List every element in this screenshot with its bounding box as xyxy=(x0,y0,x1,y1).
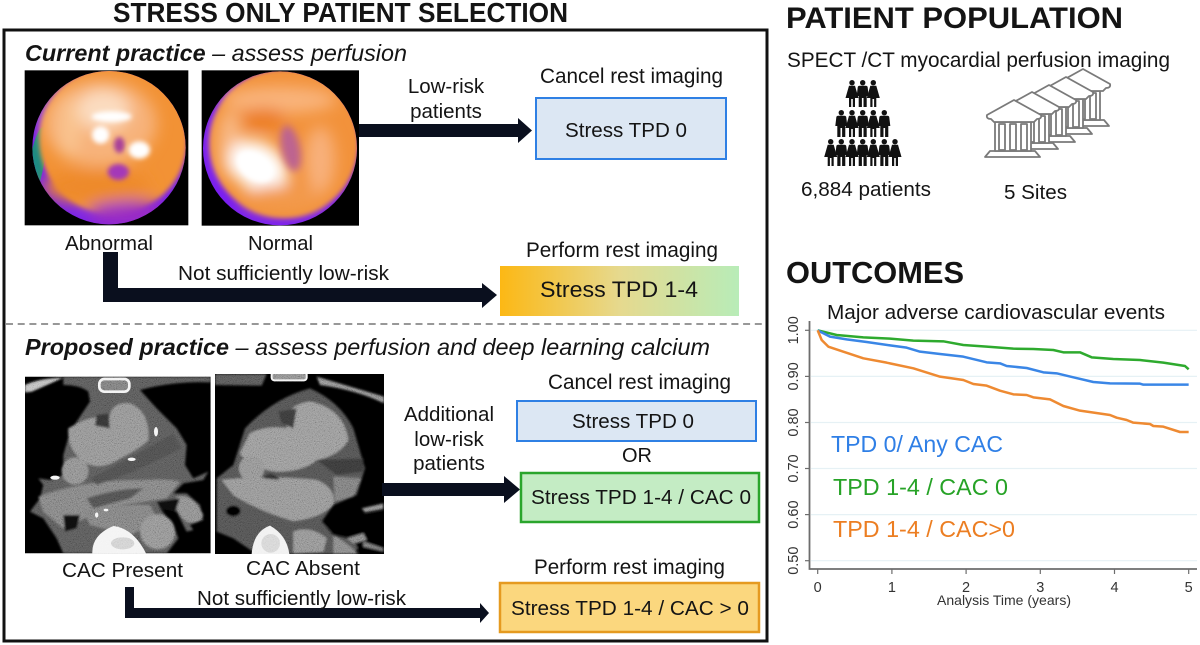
label: low-risk patients: Low-risk xyxy=(408,75,485,98)
heading: outcomes: OUTCOMES xyxy=(786,255,964,290)
label: x-axis title: Analysis Time (years) xyxy=(937,592,1071,608)
box: stress TPD 1-4 CAC 0: Stress TPD 1-4 / CAC 0 xyxy=(531,486,751,509)
box: stress TPD 0 proposed: Stress TPD 0 xyxy=(572,410,694,433)
chart: Kaplan-Meier curves: 0.80 xyxy=(786,408,802,437)
image: CT with CAC present xyxy=(25,377,211,553)
legend: TPD 1-4 CAC 0: TPD 1-4 / CAC 0 xyxy=(833,474,1008,500)
image: CT with CAC absent xyxy=(215,372,384,554)
chart: Kaplan-Meier curves: 2 xyxy=(962,580,970,596)
image: normal perfusion polar map xyxy=(202,69,359,226)
legend: TPD 0 any CAC: TPD 0/ Any CAC xyxy=(831,431,1003,457)
box: stress TPD 0 proposed xyxy=(517,401,756,441)
label: CAC present: CAC Present xyxy=(62,559,183,582)
heading: proposed practice: Proposed practice – assess perfusion and deep learning calcium xyxy=(25,334,710,360)
label: OR: OR xyxy=(622,445,652,467)
legend: TPD 1-4 CAC>0: TPD 1-4 / CAC>0 xyxy=(833,516,1015,542)
text: SPECT/CT myocardial perfusion imaging: SPECT /CT myocardial perfusion imaging xyxy=(787,49,1170,72)
arrow: low-risk to cancel rest imaging xyxy=(359,118,532,143)
heading: current practice: Current practice – assess perfusion xyxy=(25,40,407,66)
label: cancel rest imaging proposed: Cancel rest imaging xyxy=(548,371,731,394)
chart: Kaplan-Meier curves: 1.00 xyxy=(786,316,802,344)
image: abnormal perfusion polar map xyxy=(23,66,188,229)
chart: Kaplan-Meier curves: 0.70 xyxy=(786,454,802,483)
icon: five hospital sites xyxy=(985,69,1110,157)
panel: stress only patient selection frame xyxy=(4,30,767,641)
label: patients count: 6,884 patients xyxy=(801,178,931,201)
label: perform rest imaging proposed: Perform rest imaging xyxy=(534,556,725,579)
label: additional low-risk patients: patients xyxy=(413,452,485,475)
box: stress TPD 1-4: Stress TPD 1-4 xyxy=(540,277,698,302)
box: stress TPD 1-4 CAC > 0 xyxy=(500,583,759,632)
label: abnormal: Abnormal xyxy=(65,232,153,255)
label: additional low-risk patients: Additional xyxy=(404,403,494,426)
arrow: not sufficiently low-risk proposed xyxy=(125,587,489,623)
icon: patients pyramid xyxy=(824,80,902,166)
chart: Kaplan-Meier curves: 1 xyxy=(888,580,896,596)
label: not sufficiently low-risk: Not sufficiently low-risk xyxy=(178,263,390,285)
chart: Kaplan-Meier curves: 3 xyxy=(1036,580,1044,596)
label: low-risk patients: patients xyxy=(410,100,482,123)
text: chart title: Major adverse cardiovascular events xyxy=(827,301,1165,324)
chart: Kaplan-Meier curves: 0.50 xyxy=(786,547,802,575)
chart: Kaplan-Meier curves: 0.90 xyxy=(786,362,802,391)
chart: Kaplan-Meier curves: 5 xyxy=(1185,580,1193,596)
box: stress TPD 0 xyxy=(536,98,726,159)
box: stress TPD 1-4 xyxy=(500,266,739,316)
box: stress TPD 0: Stress TPD 0 xyxy=(565,119,687,142)
label: sites count: 5 Sites xyxy=(1004,181,1067,204)
label: normal: Normal xyxy=(248,232,313,255)
chart: Kaplan-Meier curves: 0.60 xyxy=(786,500,802,529)
label: additional low-risk patients: low-risk xyxy=(414,428,484,451)
label: CAC absent: CAC Absent xyxy=(246,557,360,580)
box: stress TPD 1-4 CAC > 0: Stress TPD 1-4 / CAC > 0 xyxy=(511,597,749,620)
chart: Kaplan-Meier curves: 4 xyxy=(1110,580,1119,596)
label: not sufficiently low-risk proposed: Not sufficiently low-risk xyxy=(197,588,407,610)
box: stress TPD 1-4 CAC 0 xyxy=(521,473,759,522)
heading: patient population: PATIENT POPULATION xyxy=(786,2,1123,35)
label: cancel rest imaging: Cancel rest imaging xyxy=(540,65,723,88)
arrow: not sufficiently low-risk to perform rest imaging xyxy=(103,252,497,308)
chart: Kaplan-Meier curves xyxy=(786,316,1197,596)
chart: Kaplan-Meier curves: 0 xyxy=(814,580,822,596)
label: perform rest imaging: Perform rest imaging xyxy=(526,239,718,262)
arrow: additional low-risk to cancel rest imaging xyxy=(382,476,520,503)
